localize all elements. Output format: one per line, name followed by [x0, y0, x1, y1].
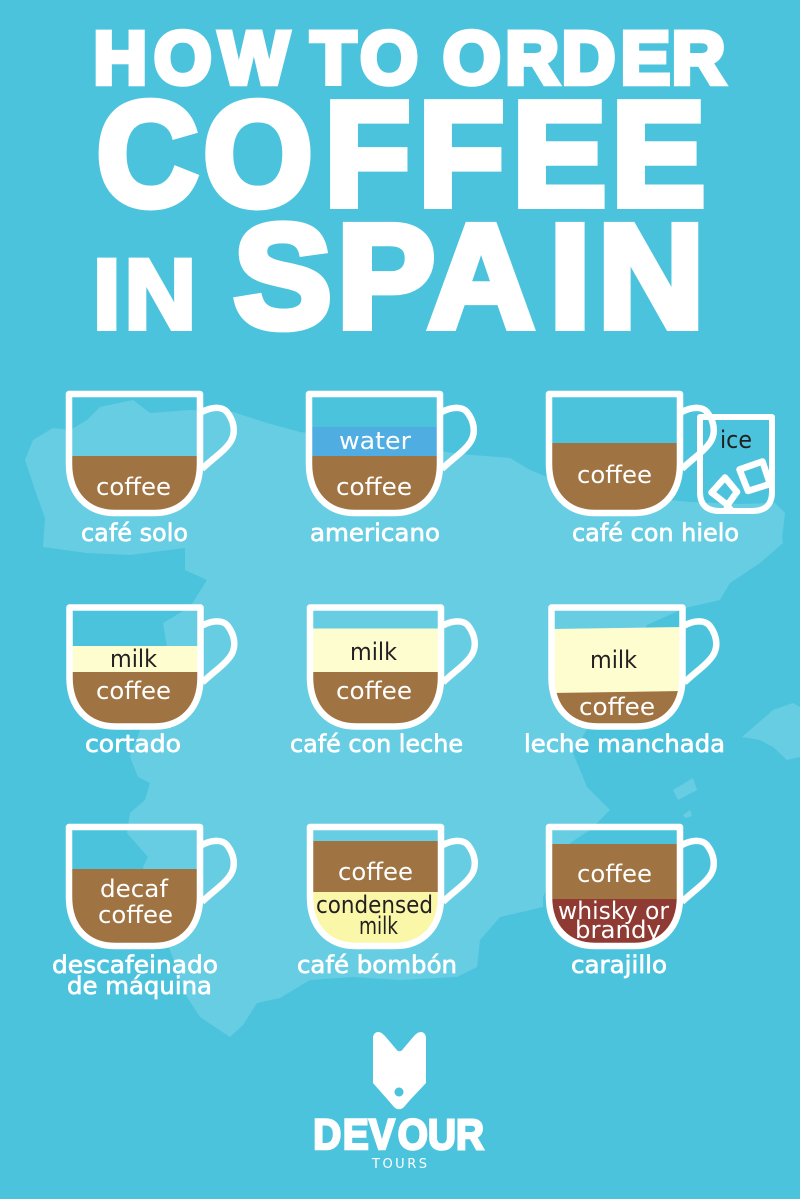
- title: [93, 16, 725, 359]
- map of Spain: [25, 400, 800, 1037]
- drink: descafeinado de maquina: coffee: [98, 901, 173, 929]
- logo: devour tours: [313, 1032, 484, 1172]
- drink: americano: coffee: [336, 473, 412, 501]
- drink: leche manchada: leche manchada: [524, 730, 725, 758]
- drink: carajillo: brandy: [575, 916, 661, 944]
- drink: cafe bombon: coffee: [338, 858, 413, 886]
- tagline: TOURS: [371, 1157, 427, 1172]
- drink: cafe bombon: [297, 827, 475, 979]
- drink: leche manchada: coffee: [579, 693, 655, 721]
- drink: americano: [309, 394, 474, 547]
- drink: cortado: milk: [110, 645, 157, 673]
- drink: leche manchada: milk: [590, 646, 637, 674]
- drink: cafe bombon: café bombón: [297, 951, 457, 979]
- drink: cafe con hielo: coffee: [577, 461, 652, 489]
- title line: in: IN: [93, 238, 196, 350]
- drink: cafe con leche: café con leche: [290, 730, 463, 758]
- drink: cafe con leche: coffee: [336, 677, 412, 705]
- drink: carajillo: carajillo: [571, 951, 667, 979]
- drink: cafe con leche: milk: [350, 638, 397, 666]
- drink: carajillo: coffee: [577, 860, 652, 888]
- drink: cafe con hielo: café con hielo: [572, 519, 739, 547]
- drink: carajillo: whisky or: [558, 897, 669, 925]
- drink: cafe con hielo: ice: [720, 426, 752, 454]
- drink: cortado: cortado: [85, 730, 181, 758]
- drink: descafeinado de maquina: [52, 827, 234, 1000]
- drink: cafe bombon: condensed: [316, 891, 433, 919]
- drink: cafe con leche: [290, 608, 475, 758]
- drink: descafeinado de maquina: de máquina: [67, 972, 212, 1000]
- drink: cafe solo: [69, 394, 234, 547]
- drink: cafe solo: café solo: [81, 519, 188, 547]
- drink: cafe solo: coffee: [96, 473, 171, 501]
- drink: descafeinado de maquina: decaf: [100, 875, 169, 903]
- drink: americano: water: [339, 427, 411, 455]
- title line: coffee: COFFEE: [97, 71, 705, 237]
- drink: cafe bombon: milk: [359, 912, 398, 940]
- title line: spain: SPAIN: [234, 195, 704, 359]
- drink: cafe con hielo: [549, 394, 772, 547]
- drink: americano: americano: [310, 519, 440, 547]
- drink: carajillo: [549, 827, 714, 979]
- drink: leche manchada: [524, 608, 725, 758]
- drink: cortado: [70, 608, 234, 758]
- icon: fox head: [373, 1032, 426, 1109]
- drink: cortado: coffee: [96, 677, 171, 705]
- icon: glass of ice: [700, 417, 772, 511]
- wordmark: DEVOUR: [313, 1110, 484, 1158]
- drink: descafeinado de maquina: descafeinado: [52, 951, 218, 979]
- title line: how to order: HOW TO ORDER: [94, 16, 725, 100]
